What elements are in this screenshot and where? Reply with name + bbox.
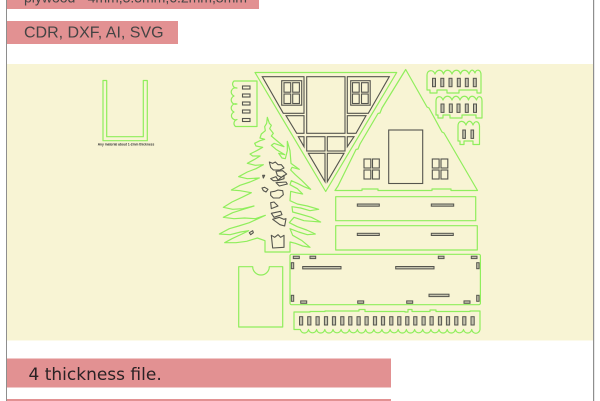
banner: 4 thickness file <box>7 358 391 388</box>
triangular gable panel <box>255 72 397 192</box>
icon: left window <box>364 159 379 179</box>
tree <box>219 117 321 252</box>
fence piece: long bottom strip <box>294 310 480 333</box>
board: upper shelf strip <box>336 197 476 221</box>
icon: gable right window <box>351 81 370 105</box>
fence piece: left vertical <box>231 81 257 126</box>
banner: 4 thickness file: 4 thickness file. <box>28 365 162 385</box>
door <box>389 130 423 184</box>
house front panel <box>335 70 478 190</box>
banner: file formats <box>7 21 178 44</box>
fence piece: middle right <box>436 96 482 118</box>
banner: file formats: CDR, DXF, AI, SVG <box>24 24 164 42</box>
banner: plywood thickness <box>7 0 259 9</box>
fence piece: small right <box>458 121 480 144</box>
card: notched back panel <box>239 267 283 327</box>
icon: gable left window <box>282 81 302 105</box>
panel: cutting layout background <box>7 64 593 340</box>
icon: U-shaped spacer piece <box>103 80 147 141</box>
board: slotted base <box>290 254 480 305</box>
banner: cropped lower bar <box>7 399 391 401</box>
text: material note: Any material about 1-2mm thickness <box>98 142 154 146</box>
fence piece: top right <box>427 70 481 93</box>
board: lower shelf strip <box>336 226 477 250</box>
icon: right window <box>432 159 448 179</box>
